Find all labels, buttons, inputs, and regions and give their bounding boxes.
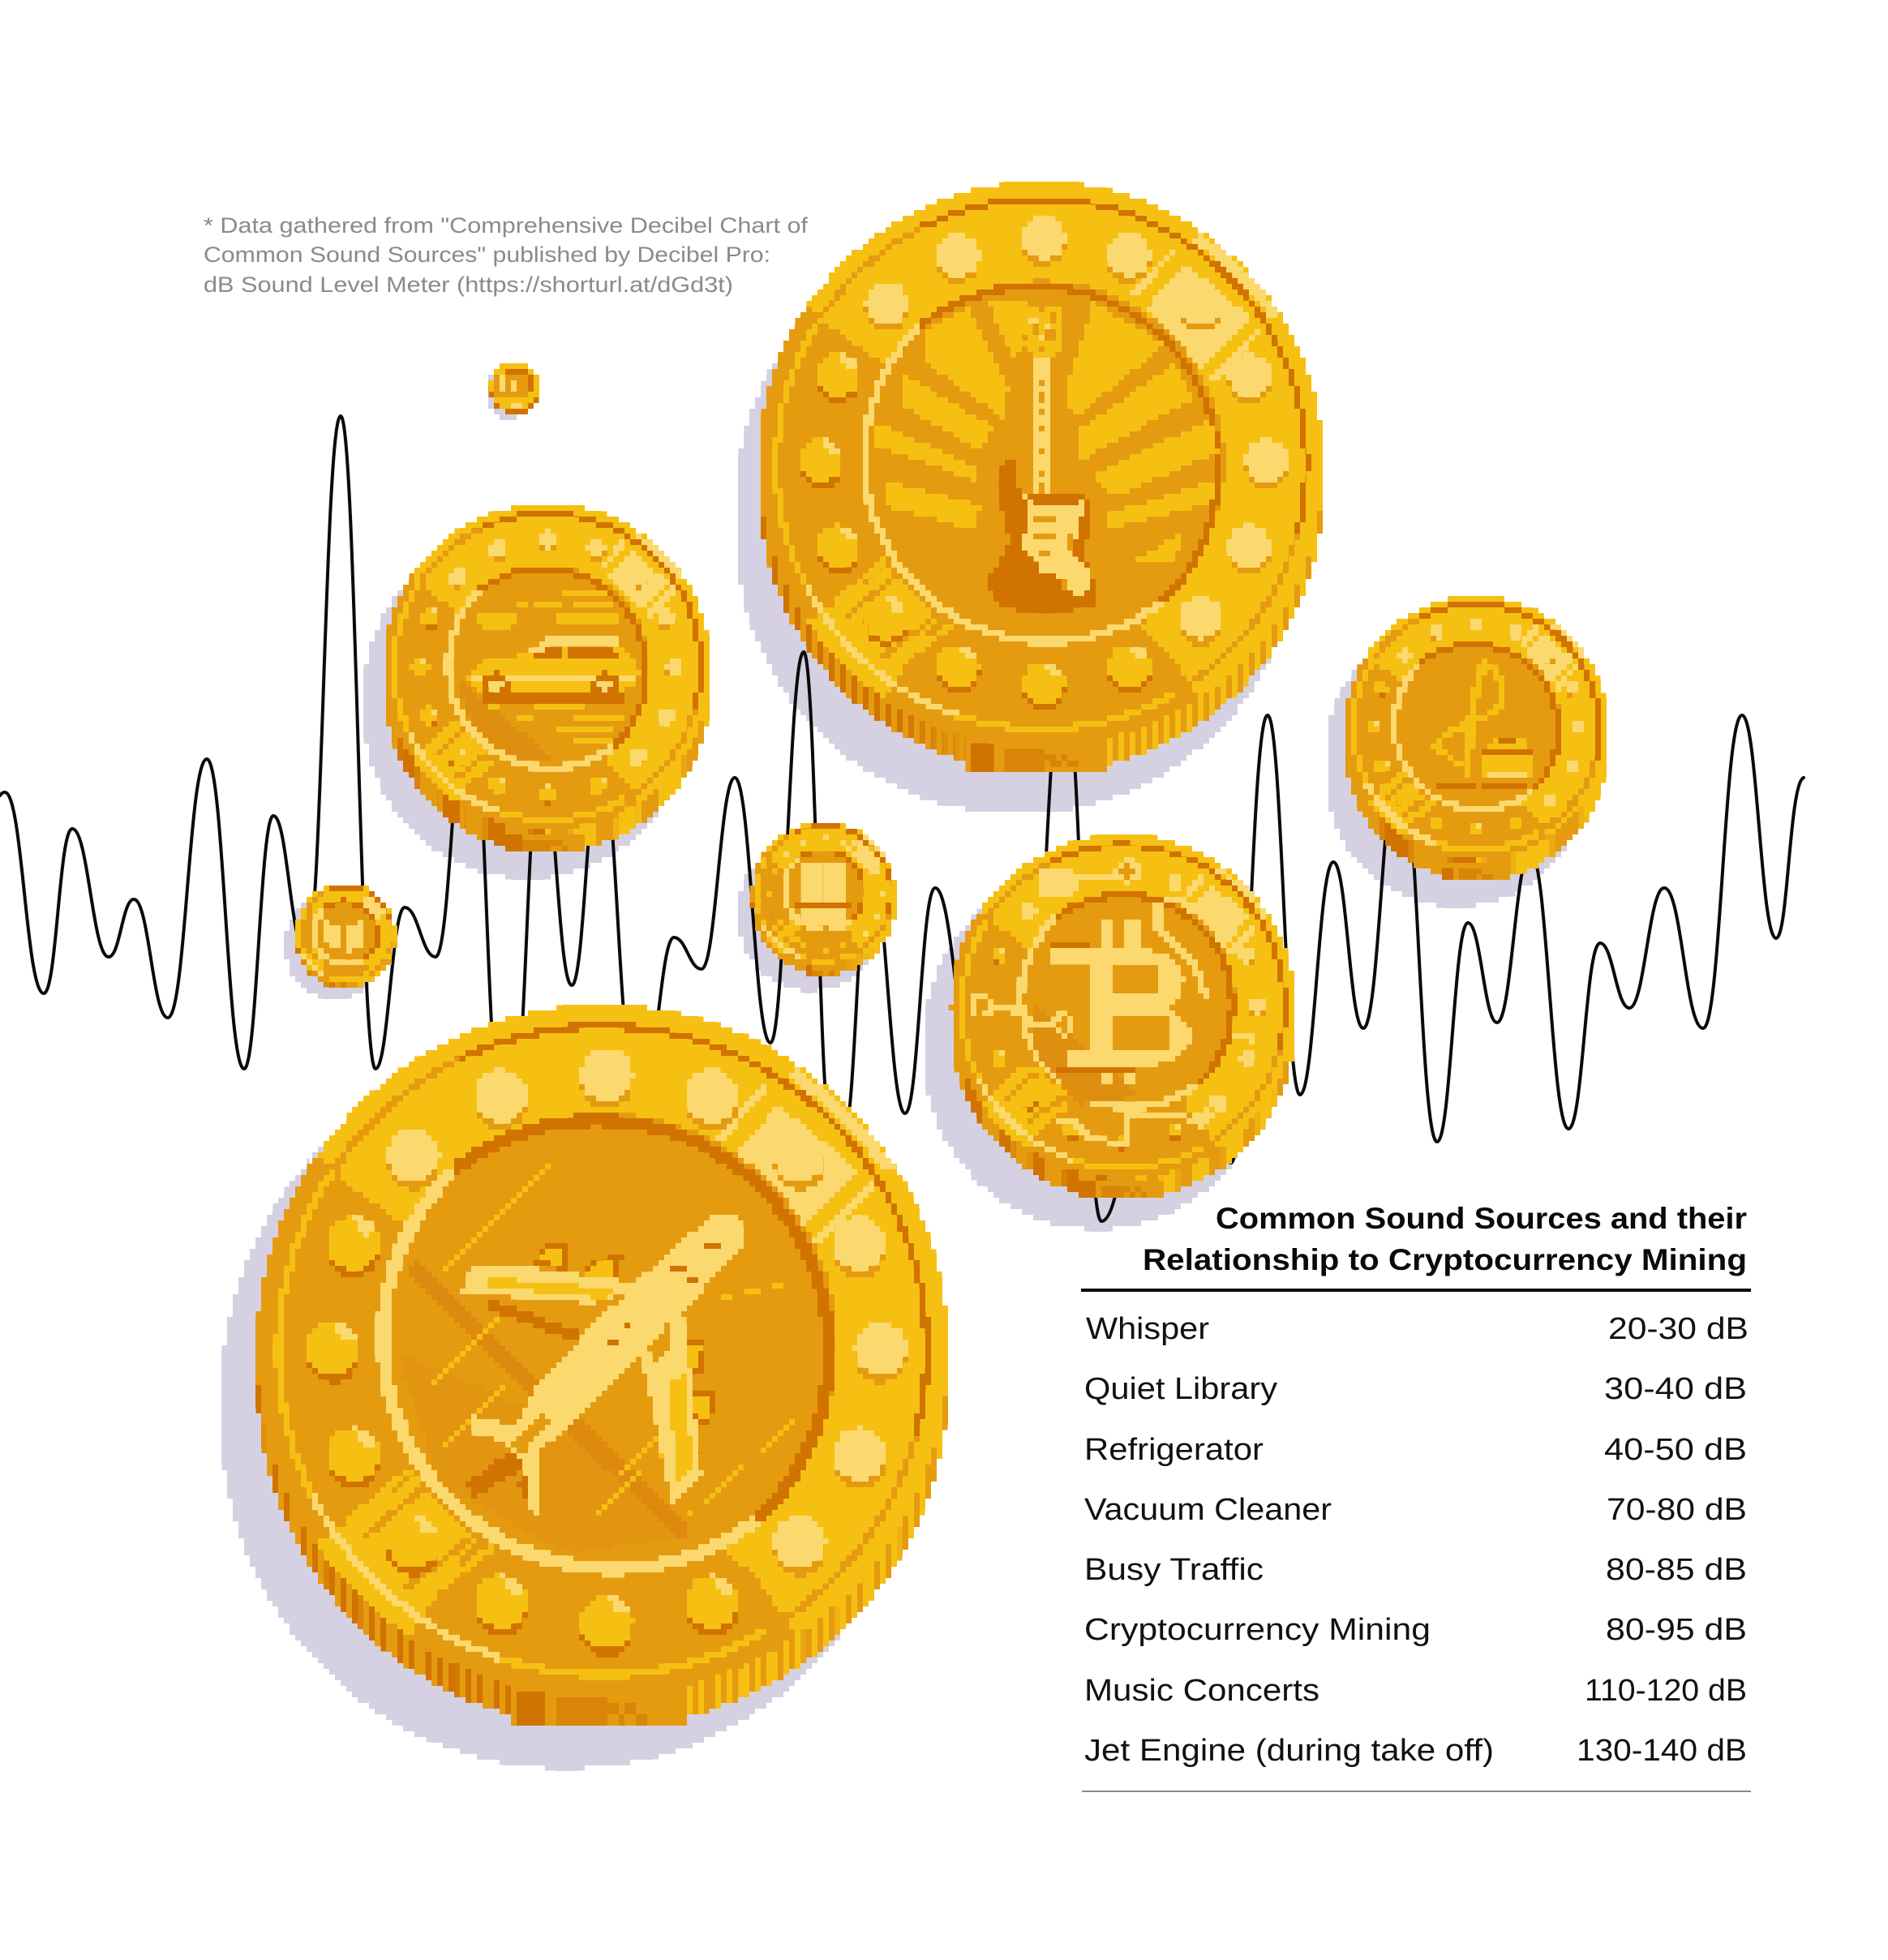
- table rows: 70-80 dB: [1607, 1493, 1747, 1527]
- table rows: Jet Engine (during take off): [1084, 1734, 1494, 1768]
- icon: vacuum cleaner: [1435, 660, 1533, 787]
- coin: whisper: [491, 362, 539, 414]
- table rows: 40-50 dB: [1604, 1433, 1747, 1467]
- icon: bitcoin symbol with circuit traces: [972, 861, 1252, 1142]
- coin: refrigerator: [752, 822, 895, 975]
- table rows: [1084, 1312, 1749, 1768]
- table: common sound sources: [1081, 1202, 1751, 1792]
- icon: refrigerator: [797, 864, 850, 923]
- table heading: Relationship to Cryptocurrency Mining: [1143, 1243, 1747, 1276]
- table rows: Vacuum Cleaner: [1084, 1493, 1332, 1527]
- sound waveform line: [0, 416, 1804, 1221]
- table rows: 20-30 dB: [1608, 1312, 1749, 1346]
- coin: jet engine: [256, 1005, 948, 1727]
- table rows: Music Concerts: [1084, 1674, 1319, 1708]
- footnote: data source: * Data gathered from "Comprehensive Decibel Chart of: [204, 213, 809, 238]
- icon: open book: [326, 921, 363, 954]
- icon: car with speed lines: [456, 590, 639, 761]
- coin shadows: [221, 224, 1587, 1769]
- pixel coins layer: [256, 182, 1607, 1727]
- table rows: 30-40 dB: [1604, 1372, 1747, 1406]
- table rows: 110-120 dB: [1585, 1674, 1747, 1708]
- table rows: 130-140 dB: [1577, 1734, 1747, 1768]
- table rows: 80-85 dB: [1606, 1553, 1747, 1587]
- table heading: Common Sound Sources and their: [1216, 1202, 1747, 1235]
- footnote: data source: dB Sound Level Meter (https://shorturl.at/dGd3t): [204, 272, 733, 297]
- table rows: Quiet Library: [1084, 1372, 1277, 1406]
- coin: guitar (music concerts): [758, 182, 1324, 772]
- coin: bitcoin (cryptocurrency mining): [951, 834, 1295, 1199]
- table rows: Whisper: [1086, 1312, 1209, 1346]
- footnote: data source: Common Sound Sources" published by Decibel Pro:: [204, 242, 770, 267]
- coin: vacuum cleaner: [1345, 596, 1607, 880]
- table rows: Refrigerator: [1084, 1433, 1264, 1467]
- coin: busy traffic car: [384, 504, 710, 852]
- icon: whisper mark: [496, 367, 534, 408]
- table rows: Cryptocurrency Mining: [1084, 1613, 1431, 1647]
- footnote: data source: [204, 213, 809, 297]
- table heading: [1143, 1202, 1747, 1276]
- icon: airplane: [397, 1164, 797, 1555]
- table rows: 80-95 dB: [1606, 1613, 1747, 1647]
- coin: quiet library book: [295, 884, 396, 989]
- icon: electric guitar with rays: [871, 298, 1218, 616]
- table rows: Busy Traffic: [1084, 1553, 1264, 1587]
